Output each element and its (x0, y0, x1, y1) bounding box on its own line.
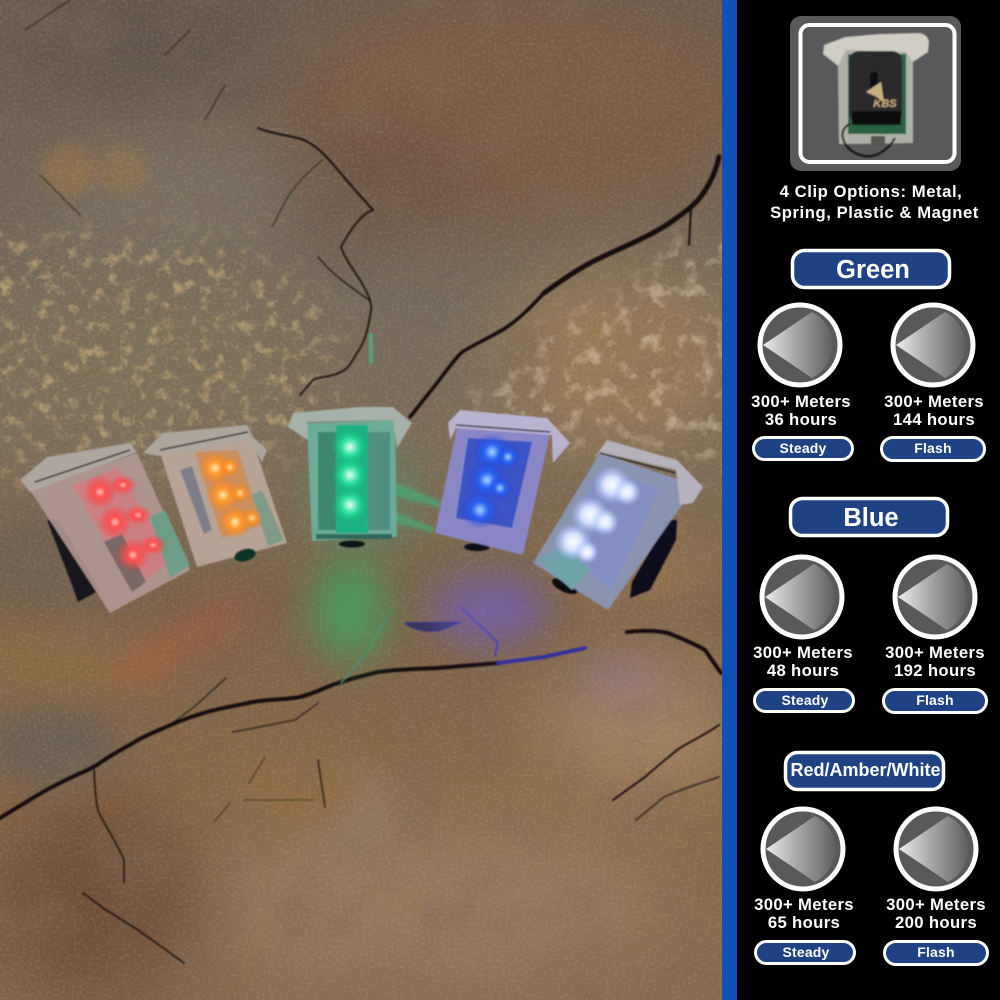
flash specs (884, 392, 984, 429)
clip options caption: Spring, Plastic & Magnet (770, 203, 979, 222)
flash badge: Flash (917, 944, 955, 960)
steady specs: 48 hours (767, 661, 839, 680)
icon: flash beam (896, 809, 976, 889)
flash badge (882, 438, 984, 460)
flash badge (884, 690, 986, 712)
floor glow (120, 440, 665, 710)
flash specs: 192 hours (894, 661, 976, 680)
flash specs (885, 643, 985, 680)
blue stripe (722, 0, 737, 1000)
heading: Blue (790, 498, 948, 536)
light: amber (143, 425, 287, 567)
clip options caption (770, 182, 979, 222)
steady specs: 36 hours (765, 410, 837, 429)
icon: clip product (823, 33, 929, 156)
flash specs: 300+ Meters (885, 643, 985, 662)
icon: steady beam (760, 305, 840, 385)
steady badge (754, 438, 852, 460)
section: Blue (753, 498, 986, 712)
steady badge: Steady (782, 944, 830, 960)
heading: Red/Amber/White: Red/Amber/White (790, 760, 941, 780)
product image card (790, 16, 961, 171)
clip options caption: 4 Clip Options: Metal, (780, 182, 962, 201)
section: Green (751, 250, 984, 460)
flash specs: 300+ Meters (884, 392, 984, 411)
icon: flash beam (893, 305, 973, 385)
flash badge: Flash (916, 692, 954, 708)
rock background (0, 0, 760, 1000)
flash specs: 300+ Meters (886, 895, 986, 914)
steady specs: 300+ Meters (754, 895, 854, 914)
steady badge (756, 942, 854, 964)
steady badge: Steady (781, 692, 829, 708)
flash specs: 200 hours (895, 913, 977, 932)
steady badge (754, 690, 854, 712)
flash specs (886, 895, 986, 932)
colored light on cracks (341, 335, 585, 683)
light: white (533, 440, 703, 610)
steady specs: 300+ Meters (753, 643, 853, 662)
flash specs: 144 hours (893, 410, 975, 429)
flash badge: Flash (914, 440, 952, 456)
light: red (20, 443, 190, 613)
heading: Blue: Blue (843, 504, 899, 532)
heading: Green: Green (836, 256, 910, 284)
steady specs: 65 hours (768, 913, 840, 932)
steady badge: Steady (779, 440, 827, 456)
flash badge (884, 942, 988, 964)
steady specs: 300+ Meters (751, 392, 851, 411)
icon: steady beam (763, 809, 843, 889)
light: blue (435, 410, 570, 555)
heading: Green (792, 250, 950, 288)
side panel background (722, 0, 1000, 1000)
heading: Red/Amber/White (786, 752, 944, 790)
icon: clip product: KBS (873, 98, 897, 110)
icon: flash beam (895, 557, 975, 637)
light: green (288, 407, 412, 548)
steady specs (751, 392, 851, 429)
icon: steady beam (762, 557, 842, 637)
steady specs (753, 643, 853, 680)
steady specs (754, 895, 854, 932)
rock cracks (0, 0, 721, 963)
photo: rock surface with lights (0, 0, 760, 1000)
section: Red/Amber/White (754, 752, 988, 964)
